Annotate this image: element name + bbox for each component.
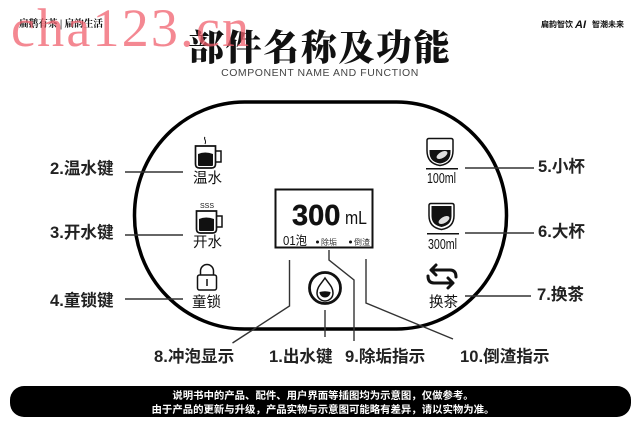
footer notice bar xyxy=(10,386,631,417)
label 7: 7.换茶 xyxy=(537,285,584,304)
residue indicator: 倒渣 xyxy=(354,237,370,247)
volume unit: mL xyxy=(345,208,367,228)
icon: child lock xyxy=(198,265,216,290)
underline: large cup xyxy=(427,233,459,234)
label 1: 1.出水键 xyxy=(269,347,333,366)
display screen xyxy=(276,190,372,248)
label: change tea icon: 换茶 xyxy=(429,294,458,311)
label: child lock icon: 童锁 xyxy=(192,293,221,311)
label 2: 2.温水键 xyxy=(50,159,114,178)
brand logo right xyxy=(541,19,624,31)
brand logo right: 扁韵智饮 xyxy=(541,19,573,29)
footer line 2: 由于产品的更新与升级，产品实物与示意图可能略有差异，请以实物为准。 xyxy=(152,403,494,416)
label 8: 8.冲泡显示 xyxy=(154,347,234,366)
brand logo left: 扁鹅有茶 | 扁韵生活 xyxy=(19,17,103,30)
icon: change tea arrows xyxy=(428,265,456,288)
subtitle: COMPONENT NAME AND FUNCTION xyxy=(221,67,419,79)
icon: warm water cup xyxy=(196,137,221,168)
label 4: 4.童锁键 xyxy=(50,290,114,310)
brew count: 01泡 xyxy=(283,234,307,248)
panel: device outline xyxy=(134,102,506,329)
brand logo right: 智潮未来 xyxy=(592,19,624,29)
label: warm water icon: 温水 xyxy=(193,170,222,187)
icon: large cup xyxy=(429,204,454,230)
icon: boiling water cup: SSS xyxy=(200,203,214,210)
icon: boiling water cup xyxy=(196,203,222,233)
underline: small cup xyxy=(426,168,458,170)
label 10: 10.倒渣指示 xyxy=(460,347,549,366)
title: 部件名称及功能 xyxy=(188,28,451,68)
label 5: 5.小杯 xyxy=(538,156,585,176)
label: 100ml: 100ml xyxy=(427,171,456,187)
label: boiling water icon: 开水 xyxy=(193,234,222,251)
label 9: 9.除垢指示 xyxy=(345,346,425,366)
label 3: 3.开水键 xyxy=(50,223,114,242)
icon: small cup xyxy=(427,138,453,166)
volume reading: 300 xyxy=(292,200,340,232)
icon: dispense water button xyxy=(310,272,340,304)
footer line 1: 说明书中的产品、配件、用户界面等插图均为示意图，仅做参考。 xyxy=(172,389,474,402)
label 6: 6.大杯 xyxy=(538,221,585,241)
leader lines xyxy=(125,168,534,343)
descale indicator: 除垢 xyxy=(321,237,337,247)
brand logo right: AI xyxy=(574,19,587,31)
label: 300ml: 300ml xyxy=(428,237,457,253)
